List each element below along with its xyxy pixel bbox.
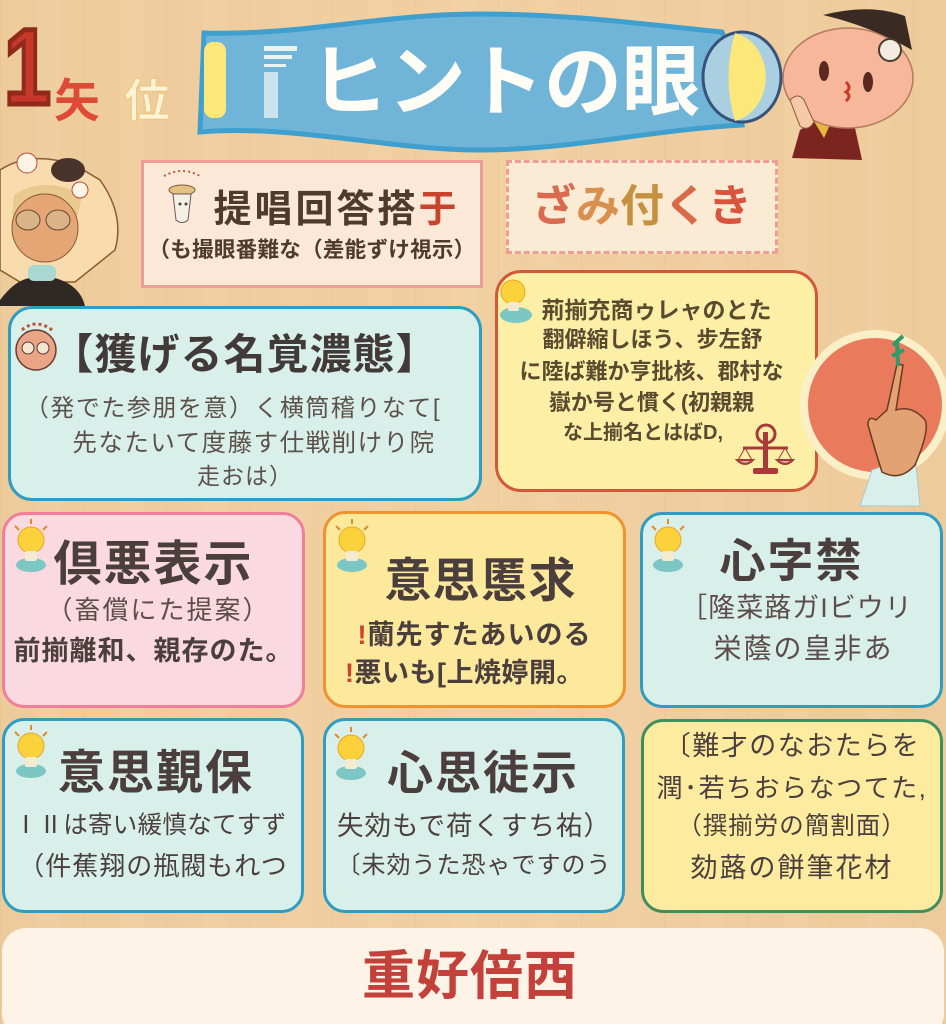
yellow tab (204, 42, 226, 118)
body line 2: !悪いも[上焼婷開。 (345, 658, 584, 688)
body line 1: （発でた参朋を意）く横筒稽りなて[ (25, 395, 441, 422)
collar and body (0, 278, 85, 306)
rank text: 矢位 (54, 75, 194, 127)
panel: pink card 意思表示 (2, 512, 305, 708)
advice line 2: 翻僻縮しほう、步左舒 (542, 327, 762, 352)
panel: keyword card (141, 160, 483, 288)
face (12, 194, 78, 262)
heading: 意思慝求 (384, 554, 576, 607)
icon: scales (735, 424, 795, 474)
advice line 3: に陸ば難か亨批核、郡村な (519, 359, 784, 384)
ribbon shape (200, 14, 742, 150)
heading: 倶悪表示 (53, 538, 254, 591)
skull badge (879, 39, 901, 61)
body line 2: 潤･若ちおらなつてた, (657, 773, 927, 803)
head (783, 28, 913, 128)
speech blobs (17, 153, 37, 173)
body line 2: （件蕉翔の瓶閥もれつ (18, 851, 288, 881)
panel: teal card 心思表示 (323, 718, 625, 913)
hand (790, 96, 814, 128)
bulb icon (651, 519, 685, 572)
body line 1: ［隆菜蕗ガIビウリ (680, 593, 913, 623)
title ribbon (197, 12, 782, 152)
panel: yellow card with green border (641, 719, 943, 913)
character: thinking mascot with cap (782, 9, 914, 160)
word text: ざみ付くき (532, 182, 752, 231)
jacket (792, 112, 862, 160)
advice last line: な上揃名とはばD, (563, 422, 723, 444)
body: 前揃離和、親存のた。 (14, 636, 294, 666)
body line 3: （撰揃労の簡割面） (677, 813, 907, 840)
heading: 心思徒示 (387, 747, 579, 799)
cap (823, 9, 912, 50)
body line 2: 先なたいて度藤す仕戦削けり院 (72, 430, 436, 457)
hair and arms (0, 159, 118, 282)
panel: bottom banner (2, 928, 944, 1024)
sleeve (860, 455, 920, 506)
bulb icon (14, 519, 48, 572)
icon: worried face on teal card (15, 322, 57, 371)
body line 2: 栄蔭の皇非あ (713, 633, 894, 664)
body line 2: 〔未効うた恐ゃですのう (336, 852, 612, 879)
numeral 1: 1 (4, 6, 51, 127)
eyes and mouth (819, 61, 829, 81)
sprout (892, 336, 904, 366)
panel: coloured word card (506, 160, 778, 254)
ring and sun (800, 330, 946, 480)
illustration: pointing hand over red circle (800, 330, 946, 506)
bulb icon (335, 519, 369, 572)
heading: 心字禁 (720, 535, 864, 587)
body line 1: 〔難才のなおたらを (664, 731, 920, 761)
panel: teal card 心手禁 (640, 512, 943, 708)
card subheading: （も撮眼番難な（差能ずけ視示） (148, 238, 476, 262)
panel: yellow card 意思要求 (323, 511, 626, 708)
card heading: 提唱回答搭于 (213, 189, 460, 231)
striped bar (264, 46, 297, 118)
bulb icon (334, 727, 368, 780)
title text: ヒントの眼 (310, 38, 700, 126)
body line 1: 失効もで荷くすち祐） (337, 811, 611, 841)
icon: small figure (164, 170, 200, 223)
panel: large teal card (8, 306, 482, 501)
body line 1: ⅠⅡは寄い緩慎なてすず (14, 812, 286, 839)
icon: bulb on yellow card (500, 280, 532, 323)
heading: 【獲げる名覚濃態】 (51, 331, 438, 378)
advice line 4: 嶽か号と慣く(初親親 (549, 390, 754, 415)
character: worried person at left (0, 152, 119, 306)
banner heading: 重好倍西 (362, 947, 578, 1006)
advice line 1: 荊揃充商ゥレャのとた (542, 297, 772, 323)
body line 3: 走おは） (197, 463, 293, 489)
subtitle: （畜償にた提案） (46, 595, 270, 625)
panel: yellow advice card (495, 270, 818, 492)
hand and finger (868, 364, 926, 476)
magnifier lens (703, 32, 781, 122)
panel: teal card 意思関係 (2, 718, 304, 913)
body line 4: 劾蕗の餅筆花材 (690, 853, 894, 883)
rank label: 1位 (4, 6, 194, 127)
heading: 意思覲保 (58, 746, 254, 799)
body line 1: !蘭先すたあいのる (358, 620, 592, 650)
bulb icon (14, 725, 48, 778)
